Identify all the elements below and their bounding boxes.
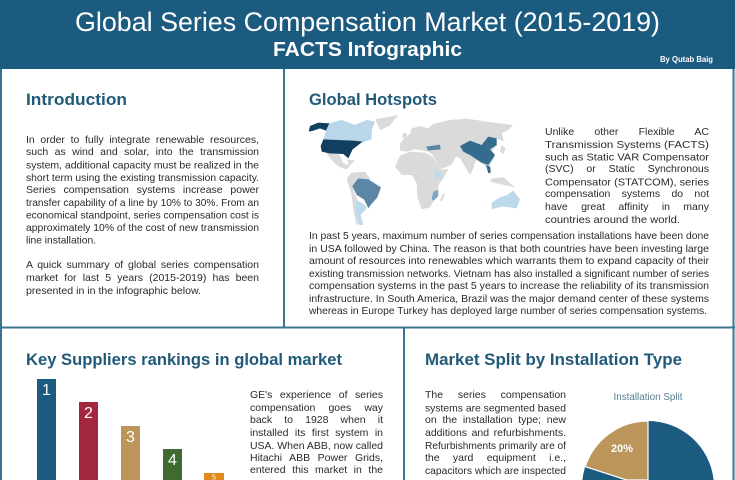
- text block: introduction: In order to fully integrate renewable resources,: [26, 134, 259, 146]
- text block: introduction: short term using the existing transmission capacity.: [26, 172, 259, 184]
- text block: hotspots side text: (SVC) or Static Synchronous: [545, 163, 709, 175]
- text block: market split: systems are segmented based: [425, 403, 566, 415]
- text block: hotspots paragraph: compensation systems in the past 5 years to increase the reliability of its transmission: [309, 280, 709, 292]
- slice label: 20%: [611, 443, 633, 455]
- text block: hotspots paragraph: infrastructure. In South America, Brazil was the major demand center of these systems: [309, 293, 709, 305]
- panel: market split: [425, 350, 714, 480]
- bar 2: 2: [84, 405, 93, 422]
- panel: global hotspots: [308, 90, 710, 317]
- brazil: [352, 178, 381, 208]
- slice: new additions left: [582, 467, 626, 480]
- text block: hotspots paragraph: In past 5 years, maximum number of series compensation installations have been done: [309, 230, 709, 242]
- panel: key suppliers: [26, 350, 383, 480]
- title: Global Series Compensation Market (2015-2019): [75, 7, 660, 37]
- text block: introduction: market for last 5 years (2015-2019) has been: [26, 272, 259, 284]
- text block: hotspots side text: Transmission Systems (FACTS): [545, 139, 709, 151]
- text block: hotspots side text: Unlike other Flexible AC: [545, 126, 709, 138]
- text block: introduction: Series compensation systems increase power: [26, 184, 259, 196]
- text block: supplier history: compensation goes way: [250, 402, 383, 414]
- header banner: [0, 0, 735, 69]
- text block: hotspots paragraph: existing transmission networks. Vietnam has also installed a significant number of series: [309, 268, 709, 280]
- alaska: [309, 123, 329, 132]
- text block: introduction: approximately 10% of the cost of new transmission: [26, 222, 259, 234]
- text block: hotspots side text: have great affinity in many: [545, 200, 709, 212]
- slice: new additions right: [648, 421, 714, 480]
- text block: market split: the yard equipment i.e.,: [425, 452, 566, 464]
- canada: [323, 120, 375, 143]
- argentina: [356, 199, 367, 225]
- text block: introduction: A quick summary of global series compensation: [26, 259, 259, 271]
- text block: hotspots paragraph: amount of resources into renewables which warrants them to expand capacity of their: [309, 255, 710, 267]
- mozambique: [432, 190, 438, 201]
- bar 3: [121, 426, 140, 480]
- bar 2: [79, 402, 98, 480]
- panel: introduction: [26, 90, 259, 297]
- text block: introduction: transfer capability of a line by 10% to 30%. From an: [26, 197, 259, 209]
- bar 4: 4: [168, 452, 177, 469]
- text block: supplier history: back to 1928 when it: [250, 414, 383, 426]
- text block: market split: additions and refurbishments.: [425, 427, 566, 439]
- bar 3: 3: [126, 429, 135, 446]
- heading: introduction: Introduction: [26, 90, 127, 109]
- text block: market split: The series compensation: [425, 389, 566, 401]
- chart title: Installation Split: [614, 391, 683, 403]
- world map: [309, 115, 520, 225]
- text block: supplier history: GE's experience of series: [250, 389, 383, 401]
- china: [460, 137, 497, 165]
- text block: hotspots side text: Compensator (STATCOM), series: [545, 176, 709, 188]
- text block: market split: capacitors which are inspected: [425, 465, 566, 477]
- text block: introduction: presented in in the infographic below.: [26, 285, 201, 297]
- bar 1: 1: [42, 382, 51, 399]
- text block: market split: on the installation type; new: [425, 414, 566, 426]
- text block: supplier history: installed its first system in: [250, 427, 383, 439]
- text block: hotspots paragraph: whereas in Europe Turkey has deployed large number of series compensation systems.: [308, 305, 707, 317]
- subtitle: FACTS Infographic: [273, 39, 462, 61]
- bar 4: [163, 449, 182, 480]
- slice: refurbishments: [585, 421, 648, 480]
- heading: market split: Market Split by Installation Type: [425, 350, 682, 369]
- text block: introduction: line installation.: [26, 234, 96, 246]
- text block: market split: [425, 389, 566, 477]
- text block: introduction: such as wind and solar, into the transmission: [26, 146, 259, 158]
- text block: market split: Refurbishments primarily are of: [425, 440, 566, 452]
- australia: [492, 191, 520, 209]
- heading: key suppliers: Key Suppliers rankings in global market: [26, 350, 342, 369]
- bar 1: [37, 379, 56, 480]
- text block: supplier history: Hitachi ABB Power Grids,: [250, 452, 383, 464]
- ethiopia: [433, 172, 443, 178]
- text block: supplier history: [250, 389, 383, 477]
- text block: supplier history: entered this market in the: [250, 464, 383, 476]
- usa: [321, 139, 363, 158]
- text block: hotspots side text: [545, 126, 710, 226]
- text block: hotspots side text: such as Static VAR Compensator: [545, 152, 710, 164]
- byline: By Qutab Baig: [660, 55, 713, 64]
- text block: hotspots side text: countries around the world.: [545, 214, 680, 226]
- text block: hotspots paragraph: [308, 230, 710, 317]
- text block: supplier history: USA. When ABB, now called: [250, 440, 383, 452]
- pie chart: installation split: [582, 391, 714, 480]
- bar chart: supplier rankings: [37, 379, 224, 480]
- text block: introduction: system, additional capacity must be realized in the: [26, 160, 259, 172]
- turkey: [426, 145, 441, 151]
- vietnam: [486, 165, 491, 173]
- text block: hotspots paragraph: in USA followed by China. The reason is that both countries have been investing large: [309, 243, 709, 255]
- heading: global hotspots: Global Hotspots: [309, 90, 437, 109]
- text block: introduction: economical standpoint, series compensation cost is: [26, 210, 259, 222]
- bar 5: [204, 473, 224, 480]
- text block: hotspots side text: compensation systems do not: [545, 188, 709, 200]
- text block: introduction: [26, 134, 259, 297]
